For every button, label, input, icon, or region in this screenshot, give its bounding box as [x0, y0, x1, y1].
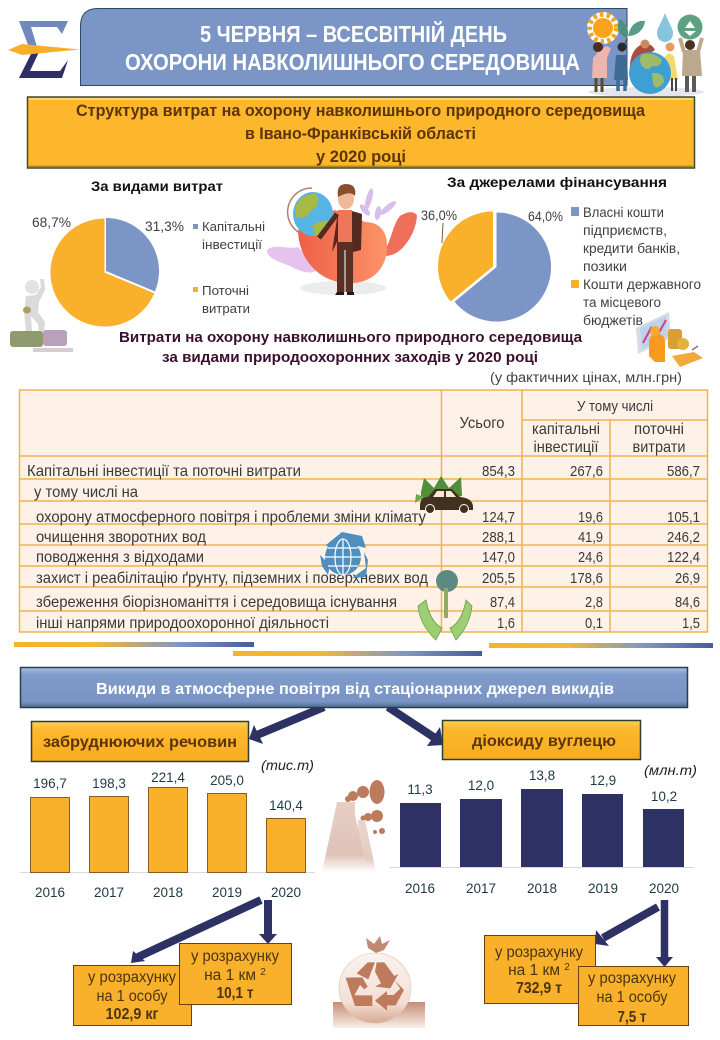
box: per square km carbon dioxide: 732,9 т: [516, 980, 562, 997]
table: expenses by measures: 122,4: [667, 549, 700, 566]
table: expenses by measures: захист і реабілітацію ґрунту, підземних і поверхневих вод: [36, 570, 429, 587]
table: expenses by measures: поточні: [634, 421, 684, 438]
table: expenses by measures: 2,8: [585, 594, 603, 611]
box: per square km pollutants: у розрахунку: [191, 948, 279, 965]
box: per person pollutants: [74, 966, 192, 1026]
bar chart: carbon dioxide: 2020: [649, 881, 679, 896]
table: expenses by measures: у тому числі на: [34, 484, 138, 501]
box: per person carbon dioxide: у розрахунку: [588, 970, 676, 987]
box: per person carbon dioxide: [578, 966, 688, 1026]
icon: car with leaves: [415, 476, 473, 514]
table: expenses by measures: 854,3: [482, 463, 515, 480]
header banner: [80, 8, 627, 86]
bar chart: carbon dioxide: 12,0: [468, 778, 494, 793]
unit: thousand tons: (тис.т): [261, 757, 314, 773]
label: carbon dioxide: [442, 720, 640, 760]
box: per square km carbon dioxide: на 1 км: [508, 962, 560, 979]
table: expenses by measures: 84,6: [675, 594, 700, 611]
heading: table title: за видами природоохоронних заходів у 2020 році: [162, 350, 538, 366]
pie chart: by funding source: 36,0%: [421, 208, 457, 223]
arrow: to per person pollutants: [131, 900, 261, 963]
pie chart: by type: [32, 214, 184, 326]
table: expenses by measures: витрати: [632, 439, 686, 456]
table note: units: (у фактичних цінах, млн.грн): [490, 370, 682, 385]
table: expenses by measures: 124,7: [482, 509, 515, 526]
table: expenses by measures: 178,6: [570, 570, 603, 587]
title panel: structure of expenses: [28, 97, 694, 168]
table: expenses by measures: очищення зворотних вод: [36, 529, 207, 546]
legend: by type: [193, 219, 265, 316]
legend: by type: Капітальні: [202, 219, 265, 234]
bar chart: carbon dioxide: 2017: [466, 881, 496, 896]
box: per person pollutants: на 1 особу: [96, 988, 168, 1005]
bar chart: pollutants: 2019: [212, 885, 242, 900]
heading: table title: Витрати на охорону навколишнього природного середовища: [119, 330, 583, 346]
header banner: ОХОРОНИ НАВКОЛИШНЬОГО СЕРЕДОВИЩА: [125, 49, 580, 75]
table: expenses by measures: 19,6: [578, 509, 603, 526]
box: per square km pollutants: 2: [260, 967, 266, 978]
table: expenses by measures: інвестиції: [534, 439, 599, 456]
box: per square km carbon dioxide: у розрахунку: [495, 944, 583, 961]
table: expenses by measures: [19, 390, 708, 632]
header banner: 5 ЧЕРВНЯ – ВСЕСВІТНІЙ ДЕНЬ: [200, 20, 507, 47]
illustration: man with globe: [267, 184, 417, 295]
bar chart: carbon dioxide: 11,3: [407, 782, 433, 797]
icon: globe with recycling arrows: [320, 532, 368, 583]
legend: by type: витрати: [202, 301, 250, 316]
table: expenses by measures: 1,6: [497, 615, 515, 632]
table: expenses by measures: 267,6: [570, 463, 603, 480]
arrow: to per square km pollutants: [259, 900, 277, 944]
bar chart: carbon dioxide: 12,9: [590, 773, 616, 788]
bar chart: pollutants: 2020: [271, 885, 301, 900]
icon: figure on money: [10, 279, 73, 352]
arrow: to per square km carbon dioxide: [595, 907, 658, 946]
pie chart: by type: 31,3%: [145, 218, 184, 234]
bar chart: carbon dioxide: [390, 768, 694, 896]
icon: chart and coins: [636, 312, 703, 367]
table: expenses by measures: 205,5: [482, 570, 515, 587]
table: expenses by measures: інші напрями природоохоронної діяльності: [36, 615, 329, 632]
table: expenses by measures: збереження біорізноманіття і середовища існування: [36, 594, 397, 611]
label: pollutants: [32, 722, 248, 762]
legend: by funding source: [571, 205, 701, 328]
bar chart: pollutants: 2018: [153, 885, 183, 900]
title panel: structure of expenses: в Івано-Франківській області: [245, 124, 476, 143]
box: per square km carbon dioxide: [484, 936, 596, 1004]
bar chart: pollutants: 198,3: [92, 776, 126, 791]
bar chart: pollutants: 2017: [94, 885, 124, 900]
box: per square km carbon dioxide: 2: [564, 962, 570, 973]
bar chart: carbon dioxide: 2016: [405, 881, 435, 896]
logo: sigma: [8, 21, 80, 78]
bar chart: carbon dioxide: 2019: [588, 881, 618, 896]
table: expenses by measures: охорону атмосферного повітря і проблеми зміни клімату: [36, 509, 426, 526]
table: expenses by measures: 26,9: [675, 570, 700, 587]
pie chart: by funding source: [421, 208, 563, 322]
illustration: people holding globe and symbols: [587, 12, 704, 97]
title panel: structure of expenses: Структура витрат на охорону навколишнього природного середовища: [76, 101, 646, 120]
legend: by funding source: Власні кошти: [583, 205, 664, 220]
bar chart: pollutants: 2016: [35, 885, 65, 900]
box: per person carbon dioxide: на 1 особу: [596, 989, 668, 1006]
table: expenses by measures: Капітальні інвестиції та поточні витрати: [27, 463, 301, 480]
table: expenses by measures: поводження з відходами: [36, 549, 204, 566]
legend: by funding source: підприємств,: [583, 223, 667, 238]
arrow: to per person carbon dioxide: [656, 900, 673, 967]
legend: by funding source: позики: [583, 259, 627, 274]
table: expenses by measures: 87,4: [490, 594, 515, 611]
legend: by type: Поточні: [202, 283, 249, 298]
bar chart: pollutants: [20, 770, 315, 900]
table: expenses by measures: 105,1: [667, 509, 700, 526]
bar chart: pollutants: 205,0: [210, 773, 244, 788]
heading: table title: [119, 330, 583, 366]
table: expenses by measures: капітальні: [532, 421, 600, 438]
banner: emissions: Викиди в атмосферне повітря від стаціонарних джерел викидів: [96, 681, 614, 698]
bar chart: pollutants: 221,4: [151, 770, 185, 785]
table: expenses by measures: 246,2: [667, 529, 700, 546]
heading: by funding source: За джерелами фінансування: [447, 174, 667, 190]
table: expenses by measures: Усього: [460, 415, 505, 432]
bar chart: pollutants: 196,7: [33, 776, 67, 791]
table: expenses by measures: 1,5: [682, 615, 700, 632]
pie chart: by funding source: 64,0%: [528, 209, 563, 224]
pie chart: by type: 68,7%: [32, 214, 71, 230]
bar chart: pollutants: 140,4: [269, 798, 303, 813]
table: expenses by measures: 0,1: [585, 615, 603, 632]
table: expenses by measures: 288,1: [482, 529, 515, 546]
title panel: structure of expenses: у 2020 році: [316, 147, 406, 166]
table: expenses by measures: 586,7: [667, 463, 700, 480]
legend: by funding source: бюджетів: [583, 313, 643, 328]
illustration: factory smoke: [322, 780, 385, 872]
label: carbon dioxide: діоксиду вуглецю: [472, 733, 616, 750]
icon: recycling globe: [333, 936, 425, 1028]
banner: emissions: [20, 668, 688, 708]
legend: by funding source: кредити банків,: [583, 241, 680, 256]
box: per square km pollutants: [180, 944, 292, 1004]
arrow: banner to carbon dioxide: [388, 707, 443, 746]
legend: by funding source: Кошти державного: [583, 277, 701, 292]
divider bars: [14, 642, 713, 656]
table: expenses by measures: 24,6: [578, 549, 603, 566]
heading: by type of expense: За видами витрат: [91, 178, 223, 194]
unit: million tons: (млн.т): [644, 762, 697, 778]
box: per square km pollutants: на 1 км: [204, 967, 256, 984]
bar chart: carbon dioxide: 13,8: [529, 768, 555, 783]
bar chart: carbon dioxide: 10,2: [651, 789, 677, 804]
box: per person pollutants: 102,9 кг: [106, 1006, 159, 1023]
box: per person carbon dioxide: 7,5 т: [618, 1009, 647, 1026]
table: expenses by measures: У тому числі: [577, 398, 653, 415]
icon: tree in hands: [418, 570, 472, 640]
table: expenses by measures: 147,0: [482, 549, 515, 566]
table: expenses by measures: 41,9: [578, 529, 603, 546]
bar chart: carbon dioxide: 2018: [527, 881, 557, 896]
legend: by funding source: та місцевого: [583, 295, 661, 310]
legend: by type: інвестиції: [202, 237, 262, 252]
label: pollutants: забруднюючих речовин: [43, 734, 237, 751]
box: per square km pollutants: 10,1 т: [216, 985, 254, 1002]
box: per person pollutants: у розрахунку: [88, 969, 176, 986]
arrow: banner to pollutants: [249, 707, 324, 744]
